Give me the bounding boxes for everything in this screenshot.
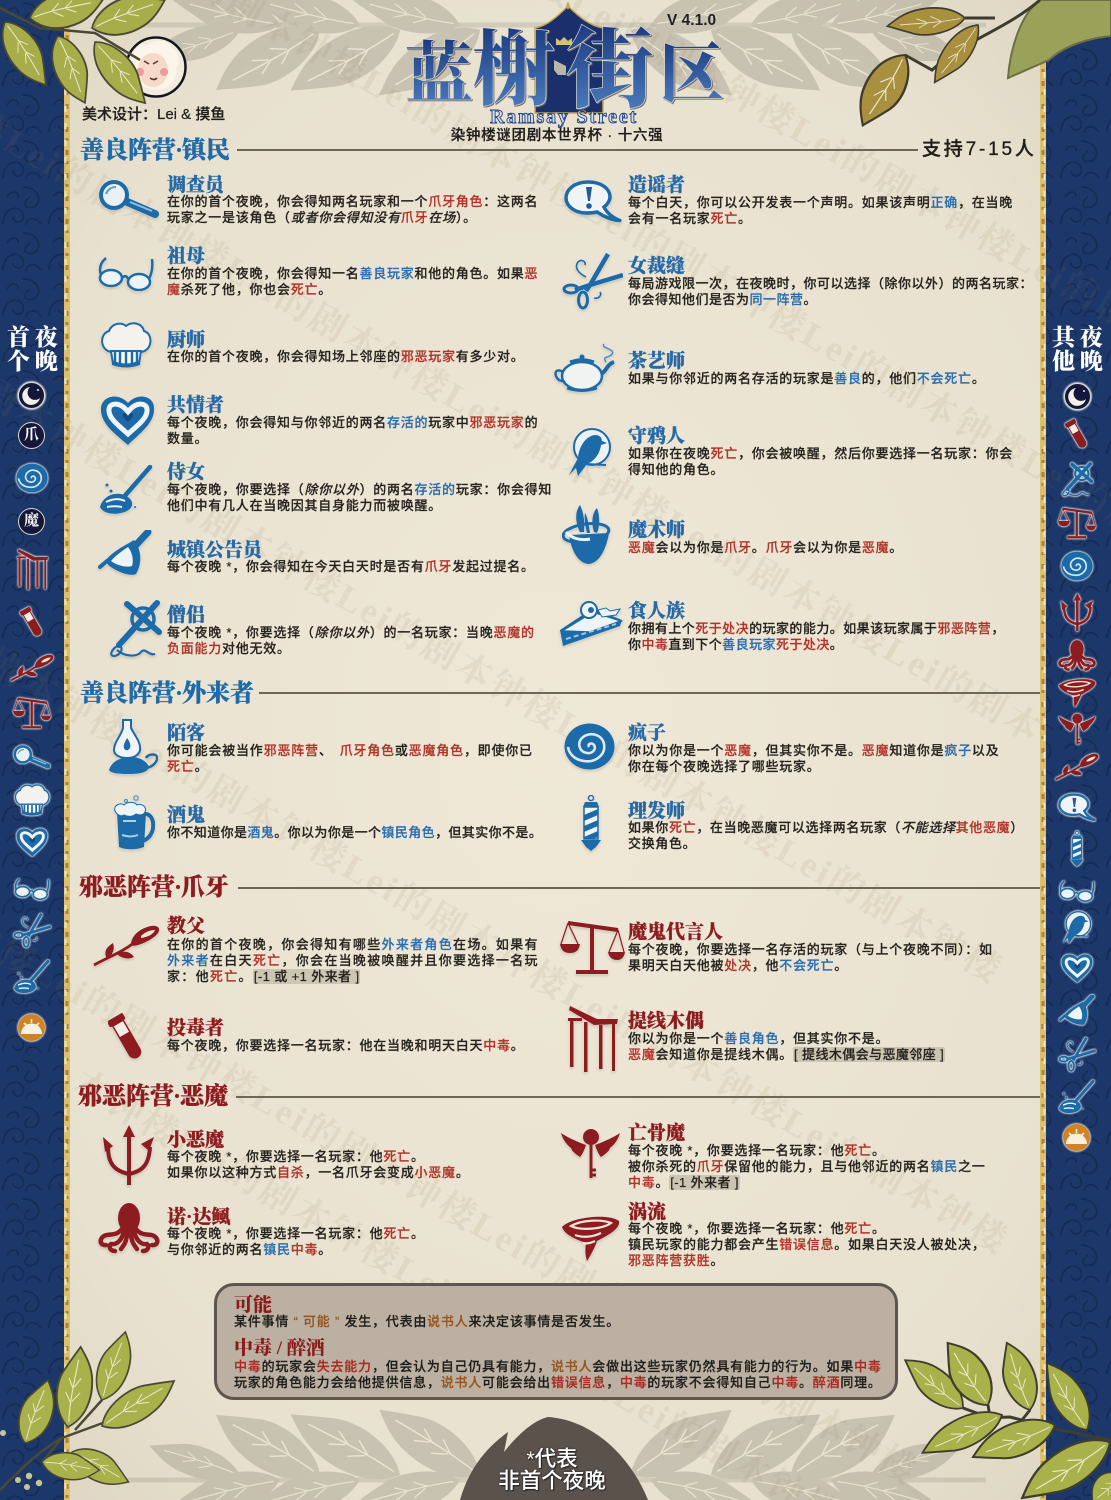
entry: 守鸦人: 得知他的角色。 <box>628 462 724 477</box>
entry: 女裁缝: 你会得知他们是否为同一阵营。 <box>628 292 817 307</box>
event subtitle: 染钟楼谜团剧本世界杯 · 十六强 <box>451 128 663 144</box>
icon: rose <box>93 925 160 967</box>
order icon: cross <box>1059 462 1095 497</box>
entry: 食人族: 你中毒直到下个善良玩家死于处决。 <box>628 637 843 652</box>
order icon: dawn sun <box>18 1014 45 1041</box>
entry: 茶艺师 <box>553 344 986 394</box>
order icon: raven <box>1062 911 1092 945</box>
icon: speech bubble <box>563 180 622 224</box>
footnote <box>490 1448 614 1494</box>
order icon: glasses <box>1058 879 1096 902</box>
entry: 造谣者: 每个白天，你可以公开发表一个声明。如果该声明正确，在当晚 <box>628 195 1013 210</box>
icon: scissors <box>561 253 624 312</box>
logo lettering: 区 <box>659 39 724 111</box>
entry: 祖母: 魔杀死了他，你也会死亡。 <box>167 282 332 297</box>
entry: 侍女: 侍女 <box>167 462 205 483</box>
entry: 僧侣 <box>109 600 535 660</box>
left blue panel <box>0 0 64 1500</box>
sidebar title <box>1052 326 1104 374</box>
order icon: vial <box>1065 418 1089 450</box>
icon: chef hat <box>100 322 153 370</box>
entry: 小恶魔: 小恶魔 <box>167 1130 224 1151</box>
panel: glossary <box>214 1283 898 1400</box>
entry: 陌客: 陌客 <box>167 723 205 744</box>
entry: 教父: 家：他死亡。[-1 或 +1 外来者 ] <box>167 969 359 984</box>
entry: 理发师: 如果你死亡，在当晚恶魔可以选择两名玩家（不能选择其他恶魔） <box>628 820 1024 835</box>
leaves: bottom left <box>0 1327 183 1495</box>
panel: glossary: 玩家的角色能力会给他提供信息，说书人可能会给出错误信息，中毒的玩家不会得知自己中毒。醉酒同理。 <box>234 1375 882 1390</box>
entry: 祖母 <box>98 246 538 297</box>
entry: 教父 <box>92 916 539 984</box>
entry: 食人族: 食人族 <box>628 601 685 622</box>
panel: glossary: 中毒的玩家会失去能力，但会认为自己仍具有能力，说书人会做出这些玩家仍然具有能力的行为。如果中毒 <box>234 1359 882 1374</box>
icon: scales <box>560 920 625 975</box>
entry: 魔鬼代言人: 魔鬼代言人 <box>628 922 723 943</box>
order icon: barber pole <box>1070 831 1084 867</box>
entry: 共情者: 共情者 <box>167 395 224 416</box>
entry: 魔术师 <box>560 505 903 566</box>
icon: octopus <box>98 1203 160 1255</box>
order icon: spiral <box>16 463 48 493</box>
entry: 城镇公告员 <box>97 530 535 578</box>
avatar <box>127 36 187 98</box>
footnote: 非首个夜晚 <box>498 1469 606 1493</box>
icon: bell <box>97 530 153 578</box>
entry: 疯子 <box>563 722 999 774</box>
icon: brush <box>99 465 154 516</box>
entry: 诺·达鲺 <box>92 1203 554 1259</box>
order icon: octopus <box>1058 640 1096 672</box>
icon: heart <box>100 396 156 447</box>
entry: 造谣者 <box>563 174 1013 226</box>
order icon: scales <box>1058 507 1096 539</box>
entry: 小恶魔 <box>92 1125 554 1185</box>
entry: 理发师: 理发师 <box>628 801 685 822</box>
heading: townsfolk: 善良阵营·镇民 <box>80 138 230 164</box>
entry: 调查员 <box>98 174 538 225</box>
order icon: rose <box>1055 753 1099 781</box>
entry: 城镇公告员: 每个夜晚 *，你会得知在今天白天时是否有爪牙发起过提名。 <box>167 559 535 574</box>
entry: 酒鬼: 你不知道你是酒鬼。你以为你是一个镇民角色，但其实你不是。 <box>167 825 542 840</box>
entry: 守鸦人 <box>569 426 1013 478</box>
icon: magnifier <box>98 180 160 220</box>
entry: 共情者 <box>100 394 538 447</box>
right blue panel <box>1046 0 1111 1500</box>
entry: 涡流: 每个夜晚 *，你要选择一名玩家：他死亡。 <box>628 1221 886 1236</box>
ghost leaves bottom <box>125 1392 986 1500</box>
icon: teapot <box>553 344 616 394</box>
footnote: *代表 <box>526 1447 578 1471</box>
order icon: demon badge <box>18 508 45 535</box>
entry: 魔鬼代言人 <box>553 919 1033 975</box>
entry: 女裁缝 <box>561 253 1033 312</box>
leaves: top left <box>0 0 171 113</box>
entry: 厨师: 厨师 <box>167 330 205 351</box>
icon: spiral <box>563 724 616 772</box>
credit: 美术设计：Lei & 摸鱼 <box>82 106 225 123</box>
leaves: bottom right <box>896 1333 1111 1500</box>
order icon: puppet <box>16 548 48 590</box>
entry: 祖母: 祖母 <box>167 246 205 267</box>
entry: 守鸦人: 如果你在夜晚死亡，你会被唤醒，然后你要选择一名玩家：你会 <box>628 446 1013 461</box>
entry: 亡骨魔: 亡骨魔 <box>628 1123 685 1144</box>
entry: 理发师: 交换角色。 <box>628 836 696 851</box>
logo lettering: 榭 <box>472 25 554 116</box>
logo subtitle Ramsay Street: Ramsay Street <box>490 106 638 128</box>
entry: 厨师 <box>100 322 525 370</box>
logo lettering: 蓝 <box>405 38 472 112</box>
entry: 陌客: 死亡。 <box>167 759 208 774</box>
order icon: minion badge <box>18 422 45 449</box>
heading: outsiders: 善良阵营·外来者 <box>80 681 254 707</box>
sidebar title: 其 夜 <box>1052 325 1104 350</box>
entry: 教父: 教父 <box>167 916 205 937</box>
entry: 僧侣: 僧侣 <box>167 605 205 626</box>
order icon: heart <box>16 827 48 857</box>
order icon: brush <box>1059 1080 1095 1114</box>
entry: 教父: 外来者在白天死亡，你会在当晚被唤醒并且你要选择一名玩 <box>167 953 539 968</box>
entry: 女裁缝: 每局游戏限一次，在夜晚时，你可以选择（除你以外）的两名玩家： <box>628 276 1033 291</box>
sidebar title: 个 晚 <box>7 349 59 374</box>
order icon: scissors <box>13 913 51 948</box>
glossary term: 可能: 可能 <box>234 1295 272 1316</box>
entry: 理发师 <box>580 795 1024 853</box>
entry: 僧侣: 每个夜晚 *，你要选择（除你以外）的一名玩家：当晚恶魔的 <box>167 625 535 640</box>
icon: cross <box>109 600 164 660</box>
entry: 魔鬼代言人: 果明天白天他被处决，他不会死亡。 <box>628 958 848 973</box>
order icon: rose <box>10 654 54 682</box>
entry: 侍女: 他们中有几人在当晚因其自身能力而被唤醒。 <box>167 498 442 513</box>
icon: glasses <box>98 257 155 294</box>
icon: trident <box>100 1125 157 1185</box>
order icon: tornado <box>1058 678 1096 708</box>
entry: 陌客 <box>108 718 533 776</box>
order icon: magnifier <box>13 745 51 770</box>
icon: pie <box>558 601 624 648</box>
sidebar title: 首 夜 <box>7 325 59 350</box>
order icon: dusk moon <box>18 382 45 409</box>
entry: 涡流: 邪恶阵营获胜。 <box>628 1253 724 1268</box>
logo lettering <box>405 23 724 120</box>
order icon: brush <box>14 960 50 994</box>
panel: glossary: 某件事情 “ 可能 ” 发生，代表由说书人来决定该事情是否发生。 <box>234 1314 620 1329</box>
entry: 疯子: 你在每个夜晚选择了哪些玩家。 <box>628 759 821 774</box>
entry: 涡流: 涡流 <box>628 1202 666 1223</box>
order icon: dawn sun <box>1063 1124 1090 1151</box>
entry: 侍女 <box>99 462 552 516</box>
entry: 厨师: 在你的首个夜晚，你会得知场上邻座的邪恶玩家有多少对。 <box>167 349 525 364</box>
order icon: minion badge: 爪 <box>24 427 39 443</box>
sidebar title <box>7 326 59 374</box>
icon: puppet frame <box>566 1005 618 1072</box>
icon: tornado <box>561 1215 620 1262</box>
entry: 茶艺师: 茶艺师 <box>628 351 685 372</box>
entry: 陌客: 你可能会被当作邪恶阵营、 爪牙角色或恶魔角色，即使你已 <box>167 743 533 758</box>
entry: 造谣者: 造谣者 <box>628 175 685 196</box>
entry: 亡骨魔: 每个夜晚 *，你要选择一名玩家：他死亡。 <box>628 1143 886 1158</box>
leaves: top right <box>846 0 1111 135</box>
order icon: bell <box>1059 995 1095 1027</box>
entry: 诺·达鲺: 与你邻近的两名镇民中毒。 <box>167 1242 332 1257</box>
order icon: heart <box>1061 953 1093 983</box>
entry: 教父: 在你的首个夜晚，你会得知有哪些外来者角色在场。如果有 <box>167 937 539 952</box>
order icon: spiral <box>1061 551 1093 581</box>
entry: 酒鬼: 酒鬼 <box>167 805 205 826</box>
entry: 食人族 <box>558 600 1005 652</box>
logo lettering: 街 <box>566 23 654 120</box>
entry: 侍女: 每个夜晚，你要选择（除你以外）的两名存活的玩家：你会得知 <box>167 482 552 497</box>
entry: 投毒者: 每个夜晚，你要选择一名玩家：他在当晚和明天白天中毒。 <box>167 1038 525 1053</box>
entry: 魔术师: 恶魔会以为你是爪牙。爪牙会以为你是恶魔。 <box>628 540 903 555</box>
entry: 酒鬼 <box>113 795 542 852</box>
order icon: trident <box>1059 593 1095 631</box>
entry: 亡骨魔: 被你杀死的爪牙保留他的能力，且与他邻近的两名镇民之一 <box>628 1159 986 1174</box>
icon: magic hat <box>560 505 612 566</box>
glossary term: 中毒 / 醉酒: 中毒 / 醉酒 <box>234 1338 325 1359</box>
entry: 小恶魔: 如果你以这种方式自杀，一名爪牙会变成小恶魔。 <box>167 1165 470 1180</box>
entry: 亡骨魔 <box>553 1120 1033 1191</box>
entry: 亡骨魔: 中毒。[-1 外来者 ] <box>628 1175 739 1190</box>
sidebar: first night <box>0 325 64 1045</box>
order icon: scales <box>13 697 51 729</box>
entry: 调查员: 调查员 <box>167 175 224 196</box>
entry: 小恶魔: 每个夜晚 *，你要选择一名玩家：他死亡。 <box>167 1149 425 1164</box>
icon: winged key <box>561 1128 620 1182</box>
order icon: demon badge: 魔 <box>24 513 39 529</box>
entry: 造谣者: 会有一名玩家死亡。 <box>628 211 752 226</box>
heading: demons: 邪恶阵营·恶魔 <box>78 1084 228 1110</box>
sidebar: other nights <box>1047 325 1111 1155</box>
entry: 疯子: 疯子 <box>628 723 666 744</box>
icon: oil lamp <box>108 718 160 776</box>
entry: 食人族: 你拥有上个死于处决的玩家的能力。如果该玩家属于邪恶阵营， <box>628 621 1005 636</box>
entry: 魔术师: 魔术师 <box>628 520 685 541</box>
entry: 提线木偶: 你以为你是一个善良角色，但其实你不是。 <box>628 1031 889 1046</box>
order icon: scissors <box>1058 1037 1096 1072</box>
logo: title <box>405 1 724 128</box>
sidebar title: 他 晚 <box>1052 349 1104 374</box>
entry: 守鸦人: 守鸦人 <box>628 426 685 447</box>
entry: 魔鬼代言人: 每个夜晚，你要选择一名存活的玩家（与上个夜晚不同）：如 <box>628 942 993 957</box>
entry: 共情者: 每个夜晚，你会得知与你邻近的两名存活的玩家中邪恶玩家的 <box>167 415 538 430</box>
entry: 提线木偶: 提线木偶 <box>628 1011 704 1032</box>
entry: 共情者: 数量。 <box>167 431 208 446</box>
icon: beer mug <box>113 795 156 852</box>
dark hill behind footnote <box>460 1417 648 1500</box>
order icon: dusk moon <box>1064 383 1091 410</box>
entry: 女裁缝: 女裁缝 <box>628 256 685 277</box>
entry: 投毒者: 投毒者 <box>167 1018 224 1039</box>
version: V 4.1.0 <box>667 12 716 29</box>
entry: 调查员: 玩家之一是该角色（或者你会得知没有爪牙在场）。 <box>167 210 477 225</box>
entry: 茶艺师: 如果与你邻近的两名存活的玩家是善良的，他们不会死亡。 <box>628 371 986 386</box>
entry: 祖母: 在你的首个夜晚，你会得知一名善良玩家和他的角色。如果恶 <box>167 266 538 281</box>
heading: minions: 邪恶阵营·爪牙 <box>79 875 229 901</box>
entry: 诺·达鲺: 诺·达鲺 <box>167 1207 230 1228</box>
order icon: chef hat <box>14 784 50 816</box>
entry: 城镇公告员: 城镇公告员 <box>167 540 262 561</box>
entry: 提线木偶: 恶魔会知道你是提线木偶。[ 提线木偶会与恶魔邻座 ] <box>628 1047 944 1062</box>
icon: raven <box>569 428 612 478</box>
entry: 涡流 <box>553 1199 1033 1269</box>
entry: 僧侣: 负面能力对他无效。 <box>167 641 291 656</box>
entry: 疯子: 你以为你是一个恶魔，但其实你不是。恶魔知道你是疯子以及 <box>628 743 999 758</box>
icon: barber pole <box>580 795 602 853</box>
entry: 调查员: 在你的首个夜晚，你会得知两名玩家和一个爪牙角色：这两名 <box>167 194 538 209</box>
order icon: winged key <box>1058 713 1096 747</box>
entry: 涡流: 镇民玩家的能力都会产生错误信息。如果白天没人被处决， <box>628 1237 986 1252</box>
logo badge <box>535 1 603 113</box>
order icon: glasses <box>13 877 51 900</box>
icon: poison vial <box>108 1012 145 1062</box>
ghost leaves top <box>125 0 986 113</box>
order icon: speech bubble <box>1058 793 1096 821</box>
entry: 提线木偶 <box>553 1005 1033 1072</box>
player count: 支持7-15人 <box>922 139 1037 160</box>
order icon: vial <box>20 606 44 638</box>
entry: 投毒者 <box>92 1012 554 1062</box>
entry: 诺·达鲺: 每个夜晚 *，你要选择一名玩家：他死亡。 <box>167 1226 425 1241</box>
